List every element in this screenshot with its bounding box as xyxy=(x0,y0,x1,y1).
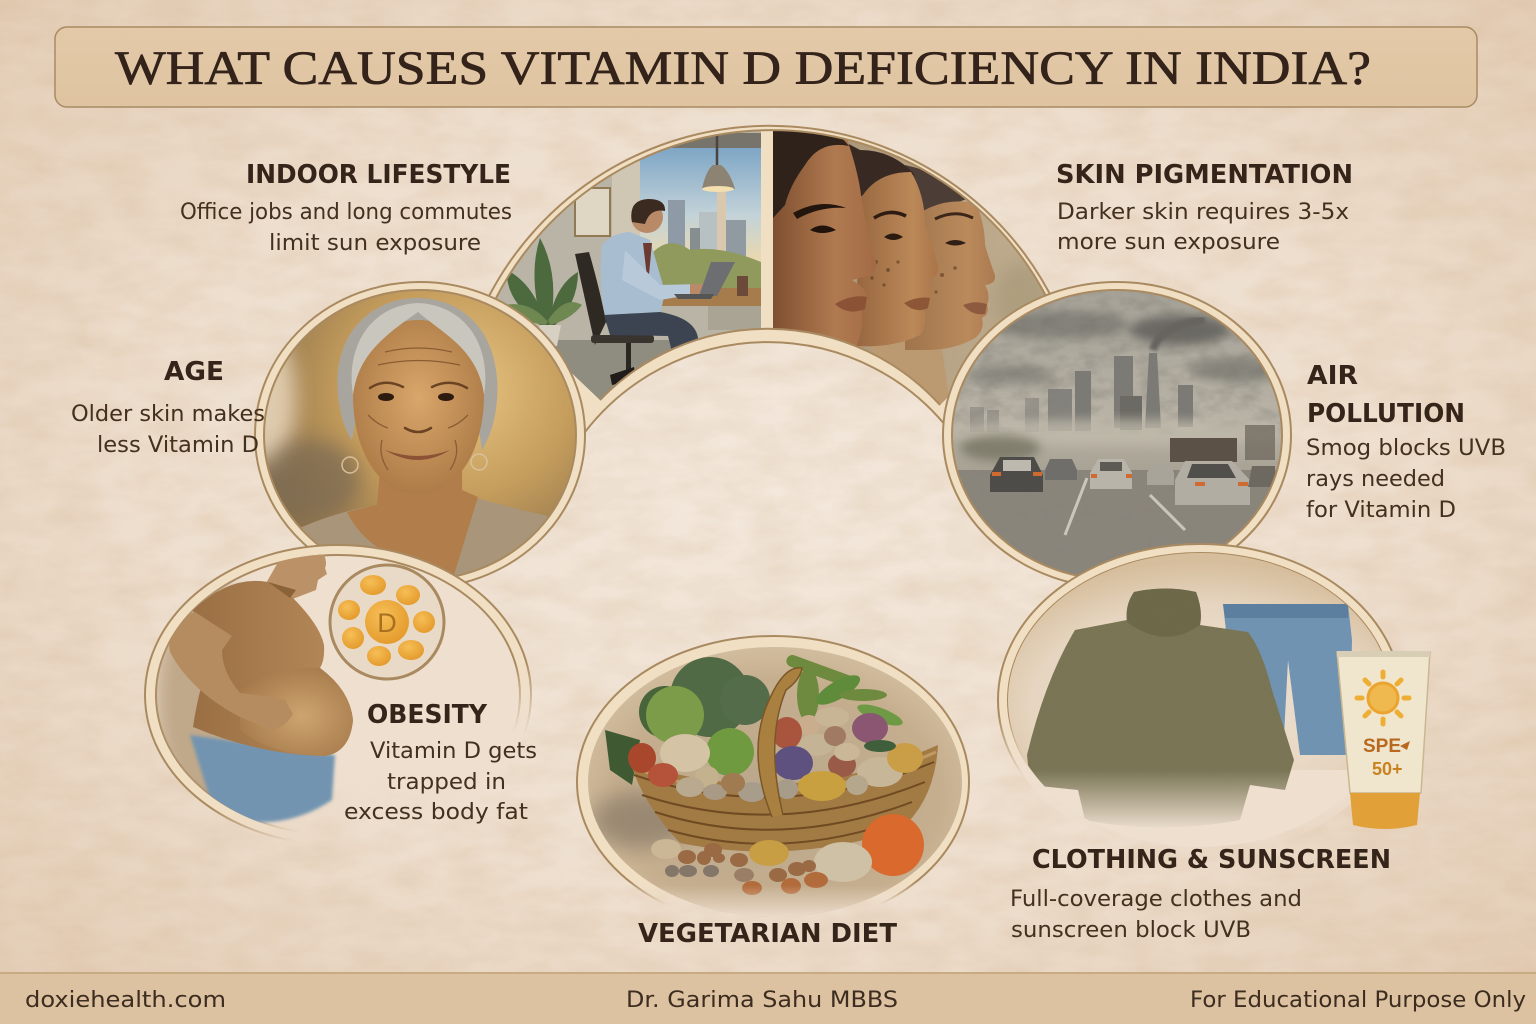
label: obesity xyxy=(344,700,537,825)
man xyxy=(601,199,704,385)
desk xyxy=(662,288,761,306)
label: indoor lifestyle: limit sun exposure xyxy=(269,230,481,256)
face two xyxy=(845,142,938,346)
face three xyxy=(905,165,995,350)
label: age: AGE xyxy=(164,357,224,387)
label: air pollution: Smog blocks UVB xyxy=(1306,435,1506,461)
chair xyxy=(575,252,606,345)
illustration: three faces xyxy=(773,131,1044,405)
footer bar: doxiehealth.com xyxy=(25,987,226,1013)
label: clothing and sunscreen xyxy=(1010,845,1391,943)
footer bar: Dr. Garima Sahu MBBS xyxy=(626,987,898,1013)
panel: vegetarian diet xyxy=(577,636,970,928)
label: clothing and sunscreen: CLOTHING & SUNSCREEN xyxy=(1032,845,1391,875)
label: skin pigmentation: SKIN PIGMENTATION xyxy=(1056,160,1353,190)
panel: clothing and sunscreen xyxy=(998,544,1430,860)
icon: sunscreen tube xyxy=(1337,651,1430,829)
icon: vitamin D bubble xyxy=(330,565,444,679)
panel: obesity xyxy=(145,545,537,845)
label: age: less Vitamin D xyxy=(97,432,259,458)
title banner xyxy=(55,27,1477,107)
label: air pollution: AIR xyxy=(1307,361,1358,391)
label: age: Older skin makes xyxy=(71,401,265,427)
illustration: office worker xyxy=(497,131,761,400)
label: obesity: Vitamin D gets xyxy=(370,738,537,764)
illustration: vegetable basket xyxy=(585,645,970,920)
label: age xyxy=(71,357,265,458)
label: vegetarian diet: VEGETARIAN DIET xyxy=(638,919,897,949)
label: indoor lifestyle: Office jobs and long commutes xyxy=(180,199,512,225)
face one xyxy=(773,130,876,345)
label: obesity: excess body fat xyxy=(344,799,528,825)
panel: air pollution xyxy=(943,282,1291,588)
label: clothing and sunscreen: Full-coverage clothes and xyxy=(1010,886,1302,912)
plant xyxy=(505,238,582,328)
label: indoor lifestyle xyxy=(180,160,512,256)
title banner: WHAT CAUSES VITAMIN D DEFICIENCY IN INDIA? xyxy=(115,42,1371,95)
icon: sunscreen tube: 50+ xyxy=(1372,759,1403,779)
icon: sunscreen tube: SPE xyxy=(1363,736,1401,757)
label: skin pigmentation: Darker skin requires 3-5x xyxy=(1057,199,1349,225)
panel: age xyxy=(240,282,585,600)
footer bar xyxy=(0,972,1536,1024)
label: air pollution: rays needed xyxy=(1306,466,1445,492)
cars xyxy=(990,457,1275,505)
laptop xyxy=(699,262,735,296)
label: obesity: trapped in xyxy=(387,769,506,795)
illustration: sweater and jeans xyxy=(1008,553,1381,847)
label: obesity: OBESITY xyxy=(367,700,488,730)
label: air pollution: POLLUTION xyxy=(1307,399,1465,429)
label: air pollution xyxy=(1306,361,1506,523)
label: skin pigmentation xyxy=(1056,160,1353,255)
illustration: torso with belly xyxy=(155,550,353,822)
panel: indoor lifestyle and skin pigmentation fan xyxy=(480,120,1065,445)
label: clothing and sunscreen: sunscreen block UVB xyxy=(1011,917,1251,943)
label: indoor lifestyle: INDOOR LIFESTYLE xyxy=(246,160,511,190)
label: air pollution: for Vitamin D xyxy=(1306,497,1456,523)
label: skin pigmentation: more sun exposure xyxy=(1057,229,1280,255)
footer bar: For Educational Purpose Only xyxy=(1190,987,1526,1013)
certificate on wall xyxy=(575,188,610,236)
illustration: smog city traffic xyxy=(945,285,1290,585)
icon: vitamin D bubble: D xyxy=(377,608,397,638)
illustration: older woman xyxy=(265,291,575,575)
